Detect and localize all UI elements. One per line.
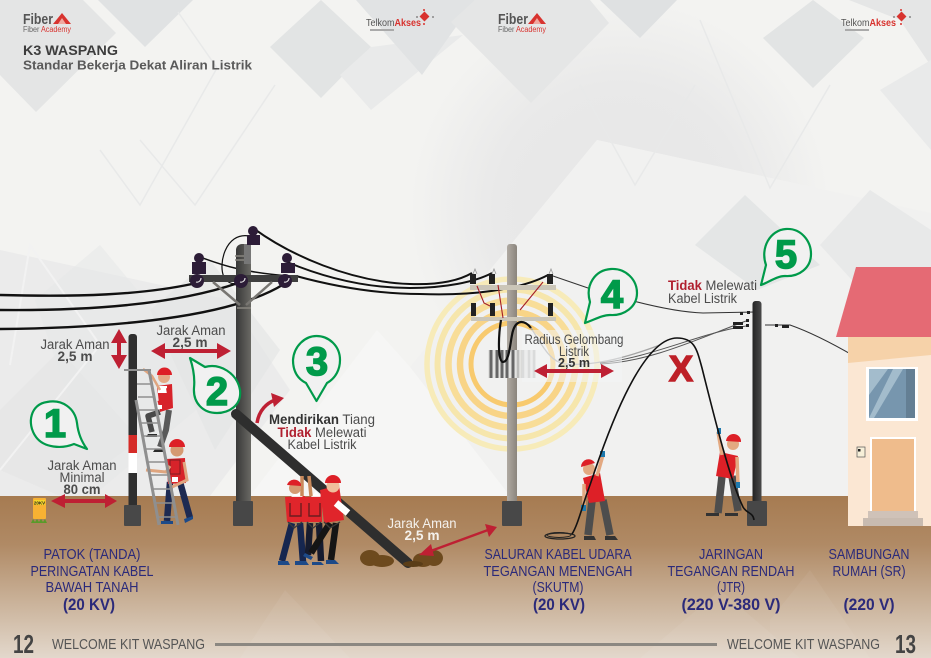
wires to low voltage pole xyxy=(553,276,858,455)
label: Jarak Aman Minimal 80 cm: Minimal xyxy=(60,470,104,485)
arrow: ground clearance xyxy=(419,524,497,556)
label: Radius Gelombang Listrik 2,5 m: 2,5 m xyxy=(558,355,590,370)
caption: SKUTM: SALURAN KABEL UDARA xyxy=(484,546,632,563)
text: Tidak Melewati Kabel Listrik xyxy=(668,278,757,306)
warning marker post: 20KV xyxy=(34,500,45,506)
overhead wires left span xyxy=(0,283,284,329)
arrow: radius xyxy=(534,364,614,378)
workers raising pole xyxy=(278,475,348,565)
footer xyxy=(13,629,916,658)
worker holding ladder xyxy=(146,439,193,524)
worker with cable right xyxy=(706,428,741,516)
logo: Telkom Akses center: TelkomAkses xyxy=(366,18,421,29)
caption: SKUTM: TEGANGAN MENENGAH xyxy=(484,563,632,580)
pole 5: low voltage pole xyxy=(747,301,767,526)
house xyxy=(836,267,931,526)
label: Jarak Aman 2,5 m ground: 2,5 m xyxy=(404,528,440,543)
label: Jarak Aman 2,5 m left: Jarak Aman xyxy=(40,337,110,352)
logo: Fiber Academy center xyxy=(498,12,546,34)
label: Jarak Aman Minimal 80 cm: 80 cm xyxy=(64,482,100,497)
pole being raised xyxy=(236,414,408,563)
caption: Patok xyxy=(30,546,154,614)
logo: Fiber Academy left: Fiber xyxy=(23,12,53,28)
text: Mendirikan Tiang Tidak Melewati Kabel Listrik: Tidak Melewati xyxy=(278,425,366,440)
label: Jarak Aman 2,5 m left xyxy=(40,337,110,364)
label: Radius Gelombang Listrik 2,5 m: Listrik xyxy=(559,344,589,359)
label: Radius Gelombang Listrik 2,5 m: Radius Gelombang xyxy=(524,332,624,347)
callout 5: 5 xyxy=(775,233,797,277)
text: Tidak Melewati Kabel Listrik: Kabel Listrik xyxy=(668,291,737,306)
worker with cable left xyxy=(545,451,618,540)
subtitle: Standar Bekerja Dekat Aliran Listrik xyxy=(23,58,253,72)
label: Jarak Aman Minimal 80 cm: Jarak Aman xyxy=(48,458,116,473)
arrow: raising direction xyxy=(257,393,284,423)
label: Jarak Aman 2,5 m ground: Jarak Aman xyxy=(388,516,456,531)
callout 2: 2 xyxy=(206,370,228,414)
caption: SR: SAMBUNGAN xyxy=(828,546,910,563)
label: Jarak Aman 2,5 m ground xyxy=(388,516,456,543)
callout 5 xyxy=(761,229,811,285)
footer: WELCOME KIT WASPANG xyxy=(52,636,205,653)
radiation rings xyxy=(427,279,597,449)
logo: Fiber Academy center: Fiber Academy xyxy=(498,25,546,34)
callout 1 xyxy=(31,401,87,449)
pole 2: concrete pole with crossarm xyxy=(189,226,298,526)
caption: SKUTM: (20 KV) xyxy=(533,595,585,614)
label: Jarak Aman 2,5 m center: Jarak Aman xyxy=(156,323,226,338)
transformer xyxy=(488,320,660,378)
callout 2 xyxy=(190,358,240,414)
caption: Patok: BAWAH TANAH xyxy=(46,579,138,596)
logo: Fiber Academy center: Fiber xyxy=(498,12,528,28)
text: Mendirikan Tiang Tidak Melewati Kabel Listrik: Kabel Listrik xyxy=(288,437,357,452)
warning marker post xyxy=(31,498,47,523)
worker climbing ladder xyxy=(143,368,173,452)
logo: Telkom Akses right: TelkomAkses xyxy=(841,18,896,29)
label: Jarak Aman Minimal 80 cm xyxy=(48,458,116,497)
title: K3 WASPANG xyxy=(23,42,118,58)
logo: Telkom Akses right xyxy=(841,9,911,31)
caption: JTR: JARINGAN xyxy=(699,546,763,563)
caption: JTR xyxy=(668,546,794,614)
footer: WELCOME KIT WASPANG xyxy=(727,636,880,653)
logo: Telkom Akses center xyxy=(366,9,434,31)
caption: JTR: TEGANGAN RENDAH xyxy=(668,563,794,580)
marker pole with red white stripes xyxy=(124,334,141,526)
caption: Patok: PATOK (TANDA) xyxy=(44,546,140,563)
caption: SR xyxy=(828,546,910,614)
caption: JTR: (220 V-380 V) xyxy=(682,595,780,614)
label: Jarak Aman 2,5 m left: 2,5 m xyxy=(58,349,92,364)
label: Jarak Aman 2,5 m center: 2,5 m xyxy=(172,335,208,350)
caption: Patok: PERINGATAN KABEL xyxy=(30,563,154,580)
X mark: X xyxy=(669,348,693,389)
caption: SR: RUMAH (SR) xyxy=(832,563,906,580)
label: Radius Gelombang Listrik 2,5 m xyxy=(522,330,624,382)
caption: SR: (220 V) xyxy=(844,595,894,614)
logo: Fiber Academy left xyxy=(23,12,71,34)
callout 4: 4 xyxy=(601,273,624,317)
caption: JTR: (JTR) xyxy=(717,579,745,596)
text: Mendirikan Tiang Tidak Melewati Kabel Listrik: Mendirikan Tiang xyxy=(269,412,375,427)
label: Jarak Aman 2,5 m center xyxy=(156,323,226,350)
overhead wires middle span xyxy=(197,228,548,294)
callout 3: 3 xyxy=(306,340,328,384)
caption: SKUTM: (SKUTM) xyxy=(532,579,584,596)
ground xyxy=(0,496,931,658)
pole 4: transformer pole xyxy=(470,244,556,526)
callout 1: 1 xyxy=(44,402,66,446)
caption: SKUTM xyxy=(484,546,632,614)
text: Mendirikan Tiang Tidak Melewati Kabel Listrik xyxy=(269,412,375,452)
text: Tidak Melewati Kabel Listrik: Tidak Melewati xyxy=(668,278,757,293)
arrow: horizontal clearance to pole xyxy=(151,343,231,359)
logo: Fiber Academy left: Fiber Academy xyxy=(23,25,71,34)
cable arch xyxy=(572,338,754,534)
soil mounds xyxy=(360,550,443,567)
ladder xyxy=(124,370,178,525)
callout 4 xyxy=(585,269,637,323)
arrow: marker distance xyxy=(51,494,117,508)
caption: Patok: (20 KV) xyxy=(63,595,115,614)
arrow: vertical clearance xyxy=(111,329,127,369)
callout 3 xyxy=(293,336,340,401)
